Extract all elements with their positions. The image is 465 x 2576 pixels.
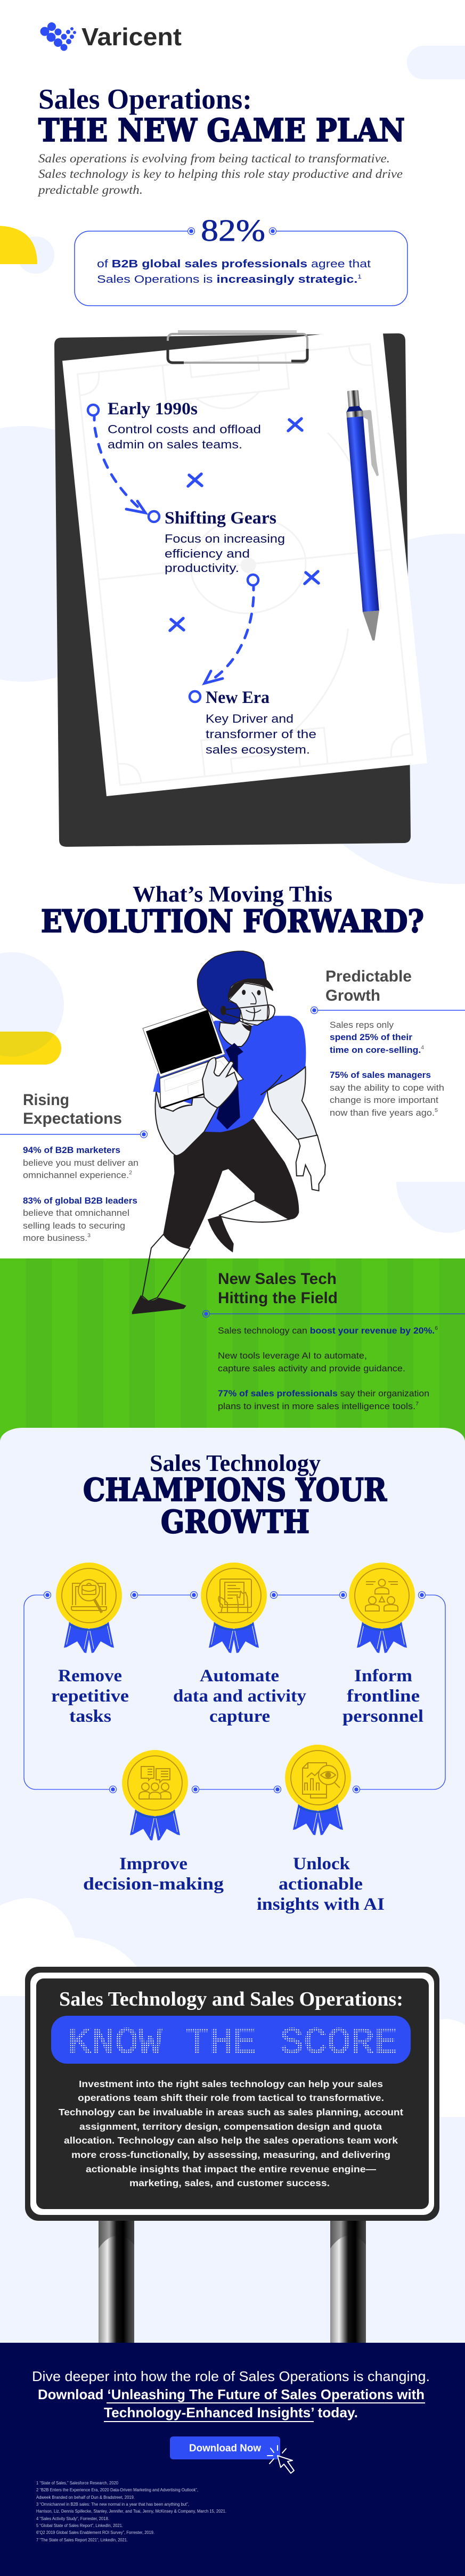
sign paragraph: allocation. Technology can also help the sales operations team work	[64, 2135, 398, 2146]
heading	[23, 1091, 122, 1127]
callout text: 1	[357, 274, 362, 280]
label: Automate	[200, 1666, 279, 1686]
stats: say the ability to cope with	[330, 1083, 444, 1093]
sign posts	[99, 2221, 366, 2343]
right arm	[267, 1067, 317, 1139]
label: Remove	[58, 1666, 122, 1686]
facemask	[221, 1005, 275, 1021]
heading: Expectations	[23, 1110, 122, 1127]
jersey	[153, 1016, 306, 1132]
stats: more business.	[23, 1233, 84, 1243]
overlap of pill and circle	[0, 1032, 54, 1057]
logo mark	[40, 22, 76, 51]
callout text	[97, 258, 371, 285]
title line 2: THE NEW GAME PLAN	[38, 112, 405, 149]
clipboard paper	[62, 328, 427, 796]
medal: unlock actionable insights	[257, 1745, 385, 1914]
stats	[330, 1020, 444, 1118]
stats: New tools leverage AI to automate,	[218, 1351, 367, 1361]
neck	[219, 1021, 251, 1046]
connector loop	[24, 1591, 445, 1793]
stats: 94% of B2B marketers	[23, 1145, 120, 1155]
connector	[0, 1131, 147, 1138]
label: personnel	[342, 1707, 423, 1726]
stats	[23, 1145, 138, 1243]
medal: inform frontline personnel	[342, 1563, 423, 1726]
call to action text	[32, 2368, 430, 2422]
sign paragraph: operations team shift their role from tactical to transformative.	[78, 2092, 384, 2103]
play: dashed route 1	[88, 405, 145, 513]
sign paragraph: Technology can be invaluable in areas such as sales planning, account	[59, 2107, 403, 2117]
background blob left of clipboard	[0, 426, 152, 682]
stats: change is more important	[330, 1095, 438, 1105]
heading	[325, 968, 412, 1004]
label: repetitive	[51, 1687, 129, 1706]
heading line 3: GROWTH	[161, 1503, 309, 1540]
stats: believe that omnichannel	[23, 1208, 129, 1218]
callout connector dots	[187, 228, 276, 234]
stats: now than five years ago.	[330, 1108, 428, 1118]
label	[173, 1666, 307, 1726]
stats: 7	[415, 1401, 419, 1407]
background circle left of player	[0, 952, 64, 1057]
clip	[168, 330, 307, 363]
laptop	[143, 1007, 243, 1108]
timeline: shifting gears: Focus on increasing	[165, 532, 285, 545]
player lower body	[163, 1119, 325, 1253]
left arm	[155, 1092, 217, 1156]
stats: plans to invest in more sales intelligence tools.	[218, 1401, 404, 1411]
white cloud right	[434, 2019, 465, 2117]
intro paragraph: Sales technology is key to helping this role stay productive and drive	[38, 167, 403, 181]
heading line 1: What’s Moving This	[133, 882, 332, 907]
green field band	[0, 1258, 465, 1450]
label: decision-making	[83, 1875, 224, 1894]
stats: selling leads to securing	[23, 1221, 125, 1231]
label: tasks	[69, 1707, 111, 1726]
icon: report with eye magnifier	[303, 1763, 340, 1798]
logo	[40, 22, 182, 51]
medal: remove repetitive tasks	[51, 1563, 129, 1726]
icon: team hierarchy	[365, 1580, 398, 1611]
sign paragraph: Investment into the right sales technology can help your sales	[79, 2079, 383, 2089]
timeline: early 1990s: admin on sales teams.	[108, 438, 242, 451]
heading: New Sales Tech	[218, 1270, 337, 1288]
medal: improve decision-making	[83, 1750, 224, 1894]
label	[342, 1666, 423, 1726]
helmet	[198, 951, 266, 1024]
heading: Predictable	[325, 968, 412, 985]
title	[38, 83, 405, 149]
footnotes	[36, 2481, 226, 2542]
footnotes: Adweek Branded on behalf of Dun & Bradstreet, 2019.	[36, 2495, 135, 2500]
beard	[241, 1024, 251, 1032]
footnotes: 4 “Sales Activity Study”, Forrester, 2018.	[36, 2516, 109, 2521]
sign frame	[25, 1967, 439, 2221]
label: data and activity	[173, 1687, 307, 1706]
sleeve crease	[260, 1075, 282, 1095]
heading line 2: EVOLUTION FORWARD?	[41, 903, 424, 939]
hair	[228, 979, 273, 1000]
label: actionable	[279, 1875, 363, 1894]
play: ring 2	[149, 511, 159, 522]
background circle behind yellow shape	[17, 236, 54, 274]
text block: predictable growth	[311, 968, 465, 1118]
stats: Sales technology can boost your revenue by 20%.	[218, 1326, 430, 1336]
timeline: shifting gears: productivity.	[165, 561, 239, 575]
heading: Rising	[23, 1091, 69, 1109]
scoreboard text: KNOW THE SCORE	[68, 2023, 398, 2065]
play: X marks	[170, 419, 319, 631]
sign paragraph: marketing, sales, and customer success.	[129, 2178, 330, 2188]
stats: time on core-selling.	[330, 1045, 418, 1055]
sign paragraph: actionable insights that impact the entire revenue engine—	[86, 2164, 377, 2174]
timeline: new era: sales ecosystem.	[206, 743, 310, 756]
label: capture	[209, 1707, 270, 1726]
hand	[202, 1058, 238, 1108]
callout: 82 percent	[75, 213, 407, 306]
intro paragraph	[37, 152, 403, 197]
intro paragraph: predictable growth.	[37, 183, 143, 197]
stats: believe you must deliver an	[23, 1158, 138, 1168]
heading line 2: CHAMPIONS YOUR	[83, 1471, 387, 1508]
stats: spend 25% of their	[330, 1032, 412, 1042]
label: Unlock	[293, 1854, 350, 1874]
panel: sales technology champions	[0, 1428, 465, 2365]
heading	[218, 1270, 338, 1307]
white cloud left	[0, 1898, 136, 1996]
heading: sales technology champions your growth	[83, 1450, 387, 1540]
label: frontline	[347, 1687, 420, 1706]
pen	[345, 389, 392, 641]
stats: 5	[435, 1108, 438, 1114]
title line 1: Sales Operations:	[38, 83, 252, 115]
label: Inform	[354, 1666, 412, 1686]
label	[83, 1854, 224, 1894]
medal: automate data and activity capture	[173, 1563, 307, 1726]
player front lower leg and shoe	[132, 1234, 190, 1314]
timeline: shifting gears: efficiency and	[165, 547, 250, 560]
tie	[217, 1043, 243, 1130]
stats: 75% of sales managers	[330, 1070, 431, 1080]
label: insights with AI	[257, 1895, 385, 1914]
download button	[170, 2436, 280, 2459]
background half circle right	[396, 1182, 465, 1233]
heading: Hitting the Field	[218, 1289, 338, 1307]
footnotes: 2 “B2B Enters the Experience Era, 2020 Data-Driven Marketing and Advertising Outlook”,	[36, 2488, 198, 2492]
intro paragraph: Sales operations is evolving from being tactical to transformative.	[38, 152, 390, 166]
heading: what's moving this evolution forward	[41, 882, 424, 939]
label: Improve	[119, 1854, 187, 1874]
play: ring 3	[190, 691, 200, 702]
callout text: Sales Operations is increasingly strategic.	[97, 274, 329, 285]
stats: Sales reps only	[330, 1020, 394, 1030]
stats	[218, 1326, 438, 1411]
timeline: early 1990s: Early 1990s	[108, 399, 198, 419]
timeline: new era: Key Driver and	[206, 712, 293, 725]
connector	[311, 1007, 465, 1014]
clipboard board	[54, 333, 411, 847]
yellow quarter circle	[0, 226, 37, 264]
callout text: of B2B global sales professionals agree that	[97, 258, 371, 270]
timeline: shifting gears	[165, 509, 285, 575]
footnotes: 3 “Omnichannel in B2B sales: The new normal in a year that has been anything but”,	[36, 2502, 189, 2507]
scoreboard display	[51, 2016, 411, 2064]
label	[51, 1666, 129, 1726]
icon: tablet with hands	[218, 1579, 252, 1613]
stats: capture sales activity and provide guidance.	[218, 1363, 405, 1373]
text block: new sales tech	[202, 1270, 465, 1411]
label	[257, 1854, 385, 1914]
facial features	[242, 990, 261, 1013]
stats: 3	[87, 1233, 91, 1239]
footnotes: 6“Q2 2019 Global Sales Enablement ROI Survey”, Forrester, 2019.	[36, 2530, 154, 2535]
timeline: new era: transformer of the	[206, 727, 316, 741]
scoreboard sign	[25, 1967, 439, 2343]
heading: Growth	[325, 987, 380, 1004]
timeline: early 1990s: Control costs and offload	[108, 423, 261, 436]
background blob right of clipboard	[279, 534, 465, 884]
footer band	[0, 2343, 465, 2576]
footnotes: 7 “The State of Sales Report 2021”, LinkedIn, 2021.	[36, 2538, 128, 2542]
sign paragraph: more cross-functionally, by assessing, measuring, and delivering	[71, 2149, 390, 2160]
stats: 4	[421, 1045, 424, 1051]
icon: people with speech bubbles	[139, 1767, 171, 1799]
timeline: new era	[206, 688, 316, 756]
icon: laptop with magnifier	[71, 1580, 107, 1613]
player illustration	[132, 951, 325, 1314]
clipboard	[54, 328, 427, 847]
stats: 6	[435, 1326, 438, 1331]
download button: Download Now	[189, 2443, 261, 2454]
sign paragraph	[59, 2079, 403, 2188]
call to action text: Dive deeper into how the role of Sales Operations is changing.	[32, 2368, 430, 2384]
player upper body	[143, 951, 317, 1156]
football field lines	[78, 344, 412, 785]
yellow pill	[0, 1032, 61, 1065]
stats: 2	[129, 1170, 132, 1176]
timeline: shifting gears: Shifting Gears	[165, 509, 276, 528]
callout frame	[75, 231, 407, 306]
timeline: new era: New Era	[206, 688, 270, 707]
sign paragraph: assignment, territory design, compensation design and quota	[79, 2121, 382, 2132]
footnotes: 1 “State of Sales,” Salesforce Research, 2020	[36, 2481, 119, 2485]
icon: click cursor	[267, 2446, 294, 2473]
call to action text: Download ‘Unleashing The Future of Sales Operations with	[38, 2386, 425, 2402]
logo wordmark: Varicent	[81, 23, 182, 51]
call to action text: Technology-Enhanced Insights’ today.	[104, 2405, 358, 2420]
face	[229, 983, 268, 1025]
footnotes: Harrison, Liz, Dennis Spillecke, Stanley, Jennifer, and Tsai, Jenny, McKinsey & Company, March 15, 2021.	[36, 2509, 226, 2514]
stats: omnichannel experience.	[23, 1170, 124, 1180]
connector	[202, 1310, 465, 1318]
stats: 83% of global B2B leaders	[23, 1196, 137, 1206]
play: dashed route 2	[205, 575, 258, 683]
text block: rising expectations	[0, 1091, 147, 1243]
sign heading: Sales Technology and Sales Operations:	[59, 1988, 403, 2010]
heading line 1: Sales Technology	[150, 1450, 321, 1476]
footnotes: 5 “Global State of Sales Report”, LinkedIn, 2021.	[36, 2523, 123, 2528]
background blob top right	[407, 46, 465, 79]
timeline: early 1990s	[108, 399, 261, 451]
callout number: 82%	[201, 213, 265, 248]
stats: 77% of sales professionals say their organization	[218, 1388, 429, 1399]
